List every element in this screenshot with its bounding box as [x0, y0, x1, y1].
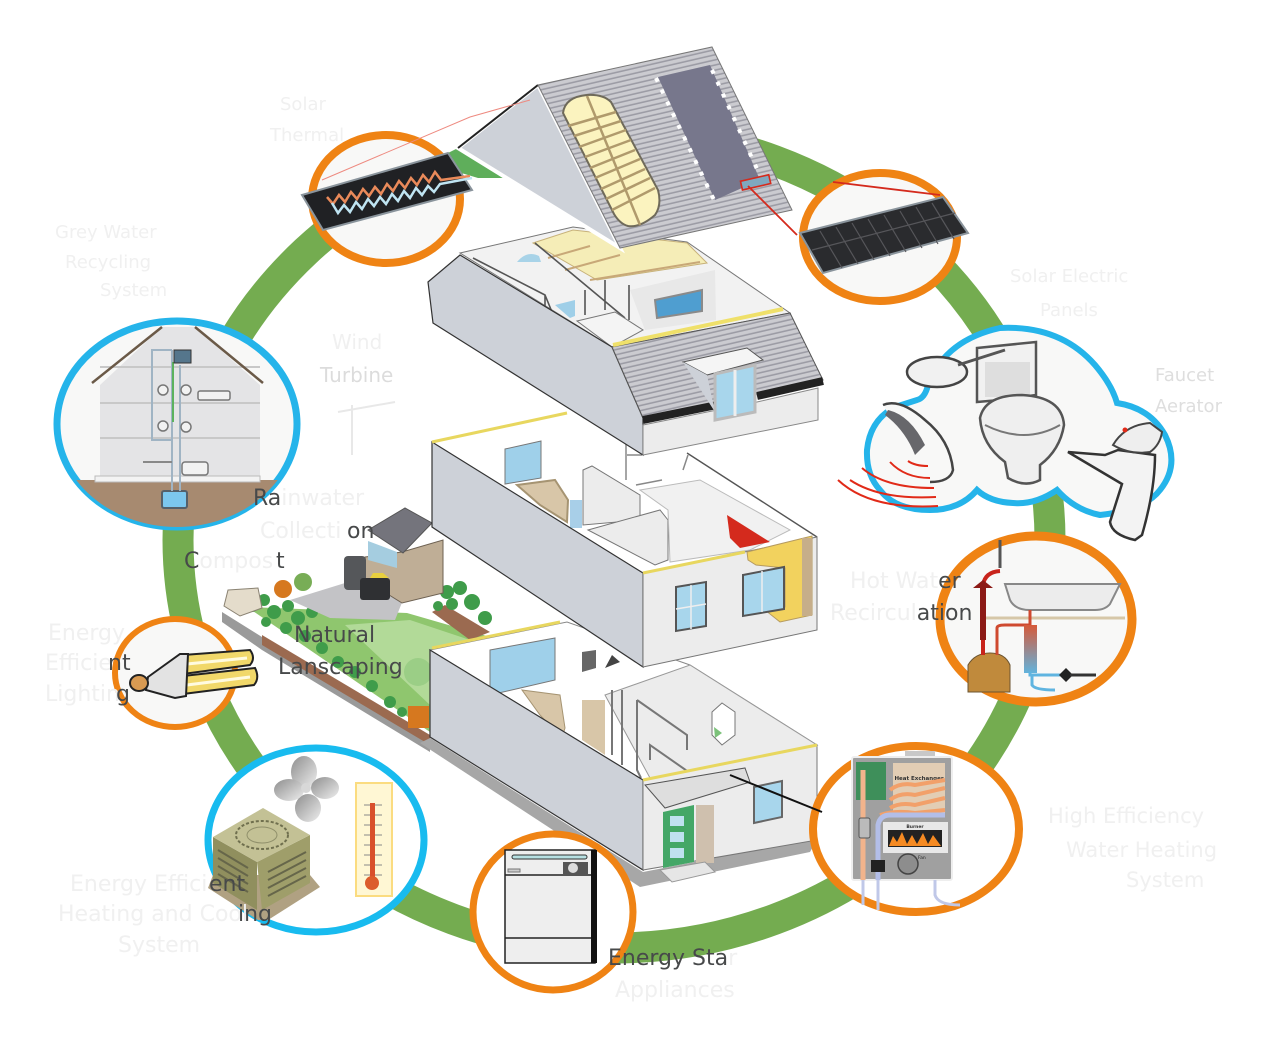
red leader line	[322, 100, 530, 180]
rain barrel	[344, 556, 366, 590]
icon: fan blades	[274, 756, 339, 822]
indicator	[508, 869, 520, 872]
bulb base	[146, 654, 188, 698]
panel: energy efficient heating and cooling	[208, 748, 424, 932]
circle	[940, 536, 1132, 702]
valve	[1059, 668, 1073, 682]
dial	[568, 863, 578, 873]
garden	[222, 508, 492, 752]
label: energy efficient heating and cooling: Energy Effici	[70, 872, 207, 897]
label: high efficiency water heating: Water Heating	[1066, 838, 1217, 862]
window bars	[676, 571, 762, 629]
label: energy efficient lighting: g	[116, 682, 130, 707]
panel: hot water recirculation	[940, 536, 1132, 702]
label: natural landscaping: Lanscaping	[278, 655, 403, 680]
body	[505, 850, 595, 963]
wood strip	[802, 538, 812, 616]
panel: solar electric panel	[748, 173, 968, 301]
right back edge	[687, 453, 817, 537]
outlet pipes	[863, 880, 960, 910]
attic joists	[533, 230, 707, 280]
burner label: Burner	[906, 824, 924, 830]
stairs	[517, 480, 568, 522]
interior rooms	[605, 665, 817, 778]
shed windows	[368, 541, 397, 568]
fan label: Fan	[918, 855, 926, 861]
red insulation panel	[727, 515, 770, 548]
front door	[663, 805, 694, 868]
label: energy star appliances: r	[728, 946, 738, 971]
label: energy efficient heating and cooling: Heating and Cool	[58, 902, 248, 927]
label: faucet aerators: Aerator	[1155, 396, 1223, 417]
label: grey water recycling system: Recycling	[65, 252, 151, 273]
hot pipe	[327, 172, 470, 204]
red leader lines	[748, 182, 940, 235]
green ring connecting the features	[178, 132, 1050, 948]
shrubs	[246, 581, 492, 717]
label: solar thermal: Solar	[280, 94, 326, 115]
shower pipe	[998, 540, 1002, 568]
tank	[977, 342, 1036, 402]
hinge	[958, 350, 1005, 365]
label: hot water recirculation: ation	[917, 601, 972, 626]
fixtures	[158, 385, 230, 475]
circle	[57, 321, 297, 527]
solar panel array	[658, 65, 760, 200]
heat exchanger column	[1024, 625, 1037, 673]
label: rainwater collection: Collecti	[260, 519, 341, 544]
bowl	[980, 395, 1064, 484]
icon: collector bar	[302, 153, 472, 230]
garden shed	[365, 508, 443, 603]
panel: high efficiency water heating	[730, 746, 1019, 912]
leader from house	[730, 775, 822, 812]
hedge bed	[262, 635, 430, 745]
tube highlights	[187, 658, 250, 685]
faucet column	[1068, 450, 1155, 540]
skylight fragment	[517, 254, 541, 262]
green ring segment under the gable	[448, 148, 503, 178]
icon: PV module	[800, 197, 968, 273]
panel: solar thermal collector	[302, 100, 530, 263]
label: energy efficient heating and cooling: ing	[238, 902, 272, 927]
floor line	[985, 616, 1125, 620]
left wall	[430, 650, 643, 870]
icon: lever faucet	[1068, 423, 1162, 540]
lever	[1113, 423, 1162, 453]
circle	[813, 746, 1019, 912]
door step	[660, 862, 715, 882]
interior floor	[432, 413, 817, 573]
dark body	[302, 153, 472, 230]
house: middle floor	[432, 413, 817, 667]
panel: grey water recycling	[57, 321, 300, 540]
interior	[460, 227, 790, 347]
cold pipe	[332, 178, 472, 213]
stairs lower run	[582, 700, 605, 755]
insulation cutaway	[747, 536, 812, 622]
lawn stripes	[345, 620, 470, 705]
brown water heater	[968, 653, 1010, 692]
dormer mullion	[734, 370, 736, 416]
label: grey water recycling system: System	[100, 280, 167, 301]
stairs	[522, 690, 565, 738]
front wall	[643, 745, 817, 870]
rear window	[505, 441, 541, 484]
label: wind turbine: Wind	[332, 330, 382, 354]
label: solar thermal: Thermal	[269, 125, 344, 146]
highlighted module	[740, 175, 771, 190]
slab	[95, 476, 260, 482]
green supply pipe	[172, 362, 174, 422]
icon: wind turbine ghost	[338, 402, 395, 455]
dark pump arrow	[973, 580, 993, 640]
partition wall upper	[583, 466, 640, 525]
yellow top trim	[643, 745, 817, 780]
cold pipe	[878, 815, 945, 880]
window right	[743, 567, 784, 616]
label: solar electric: Panels	[1040, 300, 1098, 321]
case	[852, 757, 952, 880]
roof slope	[538, 47, 792, 248]
icon: sensor faucet	[838, 403, 953, 506]
coil pipes	[880, 780, 945, 815]
flow sensor module	[859, 818, 870, 838]
icon: CFL bulb	[130, 650, 257, 698]
burner box	[883, 822, 948, 853]
shed roof	[368, 508, 432, 553]
label: energy efficient lighting: Lightin	[45, 682, 120, 707]
front wall	[643, 537, 817, 667]
potted tree	[404, 658, 432, 728]
icon: tankless heater	[852, 751, 960, 910]
label: hot water recirculation: Hot Wat	[850, 569, 938, 594]
icon: thermometer	[356, 783, 392, 896]
label: faucet aerators: Faucet	[1155, 365, 1214, 386]
shed walls	[365, 540, 443, 603]
label: energy efficient heating and cooling: ent	[209, 872, 245, 897]
panel: energy star appliances	[473, 834, 633, 990]
flow sensor label	[871, 860, 885, 872]
circle	[115, 619, 235, 727]
red riser with pump	[983, 571, 1000, 655]
icon: toilet	[907, 342, 1064, 484]
bathroom fitting	[712, 703, 735, 745]
cloud outline	[867, 328, 1171, 515]
house: ground floor	[420, 622, 818, 887]
control strip	[512, 855, 587, 859]
interior floor	[430, 622, 817, 780]
dormer window	[715, 365, 755, 420]
attic window	[655, 290, 702, 318]
circuit board	[856, 762, 886, 800]
icon: air conditioner unit	[208, 808, 320, 920]
screw cap	[130, 675, 148, 691]
label: compost: t	[276, 549, 285, 574]
circle	[803, 173, 957, 301]
house: upper floor	[428, 227, 823, 455]
porch roof	[645, 768, 750, 808]
wall outline	[626, 442, 688, 485]
circle	[208, 748, 424, 932]
card	[356, 783, 392, 896]
label: high efficiency water heating: System	[1126, 868, 1204, 892]
flue	[905, 751, 935, 759]
garden base	[222, 612, 430, 752]
rear flower bed	[432, 605, 490, 640]
base	[208, 875, 320, 920]
circle	[473, 834, 633, 990]
dial panel	[563, 862, 588, 874]
partition walls	[612, 690, 700, 780]
bath fixtures	[577, 312, 643, 347]
window left	[676, 582, 706, 631]
panel: energy efficient lighting	[115, 619, 257, 727]
porch column	[696, 805, 714, 863]
icon: dishwasher	[505, 850, 597, 963]
array brackets	[656, 70, 762, 200]
label: hot water recirculation: er	[938, 569, 962, 594]
label: compost: Compos	[184, 549, 273, 574]
mercury	[370, 803, 375, 879]
label: rainwater collection: inwater	[281, 486, 365, 511]
partition walls	[473, 243, 629, 320]
label: rainwater collection: on	[347, 519, 374, 544]
flame window	[888, 830, 942, 847]
flames	[889, 832, 941, 846]
label: high efficiency water heating: High Efficiency	[1048, 804, 1204, 828]
label: natural landscaping: Natural	[294, 623, 375, 648]
loose stair fragment	[582, 650, 596, 672]
skylight	[563, 95, 659, 226]
front window	[754, 781, 782, 823]
ground	[76, 480, 278, 527]
blue interior door	[570, 500, 582, 528]
label: energy efficient lighting: nt	[108, 651, 131, 676]
label: hot water recirculation: Recircul	[830, 601, 917, 626]
icon: bathtub	[1005, 584, 1120, 610]
garden bench	[224, 588, 262, 616]
label: energy efficient lighting: Efficie	[45, 651, 112, 676]
compost bin	[360, 578, 390, 600]
fan	[898, 854, 918, 874]
label: energy star appliances: Appliances	[615, 978, 735, 1003]
right face	[257, 835, 310, 910]
cell grid	[812, 203, 955, 268]
label: energy star appliances: Energy Sta	[608, 946, 728, 971]
label: energy efficient heating and cooling: System	[118, 933, 200, 958]
lawn	[247, 607, 490, 732]
foundation	[420, 738, 818, 887]
dark body	[800, 197, 968, 273]
circle	[312, 135, 460, 263]
back wall panel	[630, 270, 716, 330]
eaves fascia	[643, 381, 823, 420]
second fragment	[605, 655, 620, 668]
storage tank	[162, 491, 187, 508]
label: grey water recycling system: Grey Water	[55, 222, 157, 243]
supply dark section	[1070, 674, 1096, 676]
tubes	[183, 650, 253, 674]
washer line	[143, 461, 172, 463]
left face	[213, 837, 257, 910]
label: solar electric: Solar Electric	[1010, 266, 1128, 287]
dormer roof	[683, 348, 763, 375]
front wall	[643, 388, 818, 455]
faucet body	[883, 403, 953, 482]
right dark edge	[591, 850, 597, 963]
gable end	[458, 85, 620, 248]
front roof slope	[612, 313, 823, 418]
label: energy efficient lighting: Energy	[48, 621, 125, 646]
tank panel	[985, 362, 1030, 397]
sensor waves	[838, 461, 938, 506]
blue tub	[555, 300, 575, 318]
louvres	[218, 850, 306, 896]
water pipes	[152, 350, 180, 491]
window at rear	[490, 638, 555, 695]
top face	[213, 808, 310, 862]
label: wind turbine: Turbine	[319, 363, 393, 387]
heat exchanger box	[893, 763, 945, 813]
compost lid colours	[360, 573, 389, 578]
partition wall lower	[588, 510, 668, 565]
green bathroom mark	[714, 727, 722, 738]
joist lines	[548, 246, 700, 280]
roof lines	[92, 327, 263, 383]
bulb	[365, 876, 379, 890]
seat line	[985, 425, 1060, 435]
house body	[100, 327, 260, 478]
skylight grid	[568, 96, 655, 225]
dark spout	[885, 410, 925, 455]
red indicator	[1122, 428, 1128, 432]
label: rainwater collection: Ra	[253, 486, 281, 511]
door glass	[670, 816, 684, 858]
roof tank	[174, 350, 191, 363]
yellow trims	[432, 413, 745, 573]
gable dark edge	[458, 85, 538, 148]
inner grille	[247, 827, 277, 843]
paving	[290, 583, 403, 620]
heat exchanger label: Heat Exchanger	[894, 776, 944, 782]
planters	[274, 580, 292, 598]
left wall	[432, 442, 643, 667]
back wall with yellow trim	[432, 622, 560, 648]
top grille	[236, 821, 288, 849]
floor lines	[100, 367, 260, 438]
room wall	[640, 480, 790, 562]
return pipe	[997, 610, 1030, 655]
inlet pipes	[860, 770, 866, 880]
yellow ridge trim	[613, 309, 783, 345]
cold supply pipe	[1030, 672, 1095, 690]
scale	[364, 805, 382, 875]
white mask above the gable	[436, 70, 545, 156]
panel: low flow water fixtures	[838, 328, 1171, 540]
dormer side	[683, 362, 715, 412]
house: roof with skylight and solar array	[458, 47, 792, 248]
icon: house cross-section	[76, 326, 278, 527]
panel division	[505, 875, 591, 938]
left wall	[428, 255, 643, 455]
open lid	[907, 357, 967, 387]
